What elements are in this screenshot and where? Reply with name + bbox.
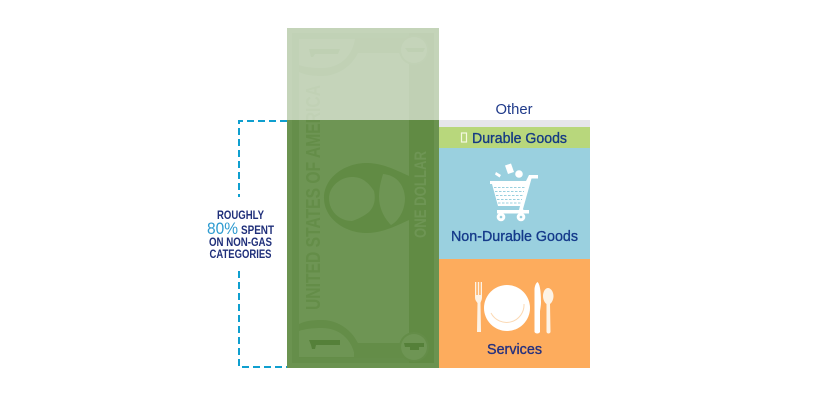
callout: roughly 80% spent on non-gas categories: ROUGHLY (217, 210, 264, 222)
bill portrait (324, 163, 409, 233)
icon: shopping cart (490, 164, 538, 221)
icon: plate (484, 285, 530, 331)
services label: Services (487, 341, 542, 358)
bill corner: bottom right (399, 332, 429, 362)
bill faded upper portion (287, 28, 439, 120)
bracket: 80 percent span (239, 121, 287, 367)
non-durable goods label: Non-Durable Goods (451, 228, 578, 245)
icon: spoon (543, 288, 554, 334)
label: other: Other (496, 101, 533, 118)
callout: roughly 80% spent on non-gas categories: SPENT (241, 225, 274, 237)
segment: services (439, 259, 590, 368)
missing glyph box (462, 133, 466, 142)
callout: roughly 80% spent on non-gas categories: 80% (207, 220, 238, 238)
callout: roughly 80% spent on non-gas categories (207, 210, 274, 261)
bill corner: top left (299, 39, 362, 76)
bill text: One Dollar: ONE DOLLAR (412, 151, 430, 238)
callout: roughly 80% spent on non-gas categories: ON NON-GAS (209, 237, 272, 249)
segment: other (439, 120, 590, 127)
bill corner: top right (399, 35, 429, 65)
segment: non-durable goods (439, 148, 590, 259)
bill corner: bottom left (299, 320, 362, 358)
icon: fork (475, 282, 482, 332)
bill text: United States of America: UNITED STATES OF AMERICA (303, 85, 325, 310)
bill band: top (355, 38, 409, 53)
durable goods label: Durable Goods (472, 130, 567, 147)
callout: roughly 80% spent on non-gas categories: CATEGORIES (210, 249, 272, 261)
icon: knife (534, 282, 541, 334)
bill band: bottom (354, 343, 409, 358)
segment: durable goods (439, 127, 590, 148)
dollar bill (287, 28, 439, 368)
